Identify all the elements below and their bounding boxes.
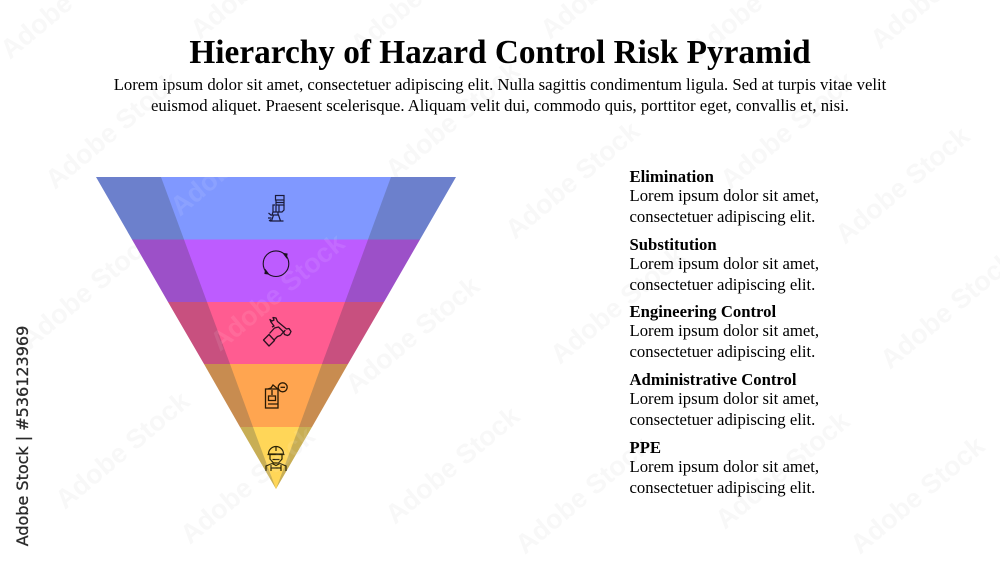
icon: cycle arrows xyxy=(263,251,289,276)
text: Adobe Stock xyxy=(830,120,976,250)
intro text: Lorem ipsum dolor sit amet, consectetuer adipiscing elit. Nulla sagittis condimentum ligula. Sed at turpis vitae velit xyxy=(114,75,886,94)
label: substitution: Lorem ipsum dolor sit amet, xyxy=(630,254,819,272)
label: administrative control: Administrative Control xyxy=(630,370,797,389)
intro text xyxy=(114,75,886,115)
text: Adobe Stock xyxy=(340,270,486,400)
label: PPE xyxy=(630,438,819,496)
label: substitution: consectetuer adipiscing elit. xyxy=(630,274,815,294)
icon: hand with wrench xyxy=(264,318,291,346)
intro text: euismod aliquet. Praesent scelerisque. Aliquam velit dui, commodo quis, porttitor eget, convallis et, nisi. xyxy=(151,96,849,115)
text: Adobe Stock xyxy=(15,225,161,355)
text: Adobe Stock xyxy=(510,430,656,560)
watermark overlay on pyramid: Adobe Stock xyxy=(165,92,311,222)
text: Adobe Stock xyxy=(500,115,646,245)
band: PPE xyxy=(240,427,312,489)
label: PPE: Lorem ipsum dolor sit amet, xyxy=(630,456,819,476)
band: elimination xyxy=(96,177,456,240)
label: administrative control: consectetuer adipiscing elit. xyxy=(630,410,815,429)
text: Adobe Stock xyxy=(845,430,991,560)
label: elimination: Lorem ipsum dolor sit amet, xyxy=(630,186,819,205)
text: Adobe Stock xyxy=(710,405,856,535)
text: Adobe Stock xyxy=(50,385,196,515)
label: PPE: consectetuer adipiscing elit. xyxy=(630,478,815,496)
label: engineering control xyxy=(630,302,819,361)
watermark overlay on pyramid: Adobe Stock xyxy=(175,420,321,550)
label: elimination: consectetuer adipiscing elit. xyxy=(630,207,815,226)
label: substitution xyxy=(630,234,819,294)
label: elimination xyxy=(630,167,819,226)
text: Adobe Stock xyxy=(380,400,526,530)
label: engineering control: consectetuer adipiscing elit. xyxy=(630,342,815,361)
label: engineering control: Lorem ipsum dolor sit amet, xyxy=(630,321,819,340)
label: substitution: Substitution xyxy=(630,234,717,254)
watermark overlay on pyramid: Adobe Stock xyxy=(40,65,186,195)
band: administrative control xyxy=(204,364,348,427)
label: PPE: PPE xyxy=(630,438,661,456)
text: Adobe Stock xyxy=(715,65,861,195)
icon: worker xyxy=(266,446,286,471)
text: Adobe Stock xyxy=(40,65,186,195)
label: administrative control xyxy=(630,370,819,429)
watermark overlay on pyramid: Adobe Stock xyxy=(205,227,351,357)
icon: robot arm xyxy=(268,196,284,221)
stock credit: Adobe Stock | #536123969 xyxy=(13,326,32,546)
label: engineering control: Engineering Control xyxy=(630,302,776,321)
title: Hierarchy of Hazard Control Risk Pyramid xyxy=(189,34,811,71)
band: engineering control xyxy=(168,302,384,364)
label: elimination: Elimination xyxy=(630,167,714,186)
text: Adobe Stock xyxy=(175,420,321,550)
watermark overlay on pyramid: Adobe Stock xyxy=(340,270,486,400)
icon: clipboard xyxy=(266,383,287,408)
text: Adobe Stock xyxy=(380,55,526,185)
label: administrative control: Lorem ipsum dolor sit amet, xyxy=(630,389,819,408)
text: Adobe Stock xyxy=(545,240,691,370)
band: substitution xyxy=(132,240,420,302)
